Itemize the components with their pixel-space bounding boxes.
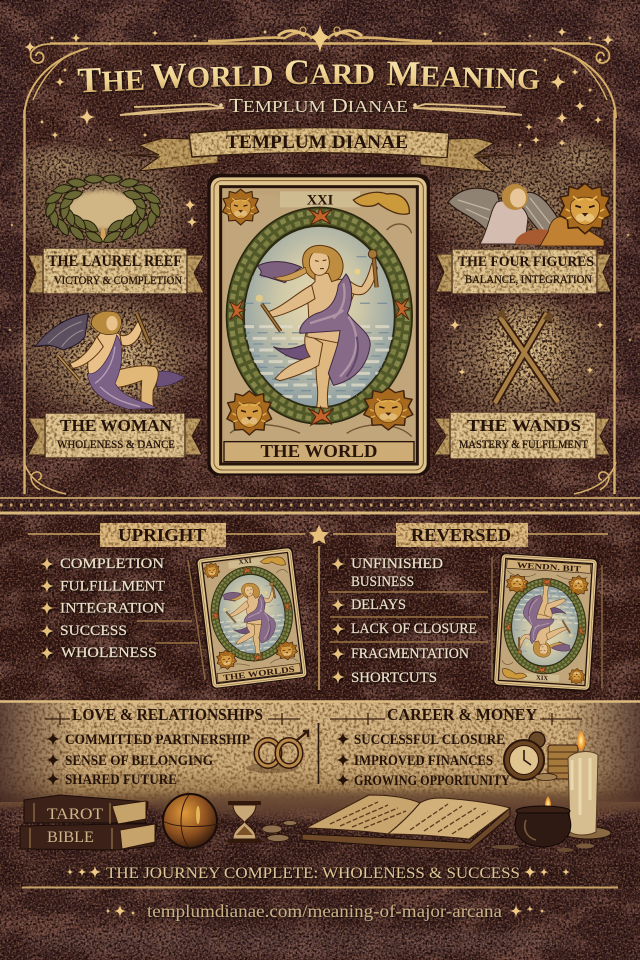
icon: pocket watch and coins <box>504 732 578 780</box>
reversed heading <box>333 523 608 547</box>
banner: The Woman: THE WOMAN <box>60 416 173 435</box>
career list <box>336 732 510 789</box>
title: THE <box>77 58 146 100</box>
reversed list: DELAYS <box>351 597 406 613</box>
title: CARD <box>284 52 375 92</box>
picture: laurel wreath <box>43 175 163 246</box>
career heading: CAREER & MONEY <box>387 705 537 724</box>
title: WORLD <box>150 53 274 96</box>
decorative star field <box>8 27 632 376</box>
love list <box>46 732 250 788</box>
frame: ornamental gold border with corner flourishes <box>24 44 616 494</box>
upright heading: UPRIGHT <box>118 525 206 545</box>
reversed card: XIX <box>536 675 549 682</box>
love list: SENSE OF BELONGING <box>65 753 213 769</box>
reversed list <box>331 556 477 686</box>
banner: The Four Figures <box>436 249 611 294</box>
love list: SHARED FUTURE <box>65 772 177 788</box>
icon: stacked books <box>20 795 157 850</box>
panel: career and money <box>330 705 582 789</box>
upright list: INTEGRATION <box>60 600 165 616</box>
banner: The Four Figures: BALANCE, INTEGRATION <box>465 272 592 286</box>
reversed list: FRAGMENTATION <box>351 646 469 662</box>
upright list <box>40 556 165 661</box>
reversed card: WENDN. BIT <box>517 561 582 574</box>
banner: The Wands: MASTERY & FULFILMENT <box>459 437 589 451</box>
picture: winged woman <box>35 311 185 409</box>
Tarot book: TAROT <box>47 806 103 823</box>
ornament: top centre star and scrollwork <box>208 24 432 53</box>
icon: two rings <box>246 731 308 773</box>
banner: The Four Figures: THE FOUR FIGURES <box>458 254 594 270</box>
icon: globe <box>163 794 222 848</box>
panel: reversed <box>328 523 608 692</box>
banner: The Woman: WHOLENESS & DANCE <box>57 437 175 451</box>
subtitle with flourish lines <box>120 95 522 117</box>
banner: The Laurel Reef <box>28 248 204 294</box>
reversed list: BUSINESS <box>351 574 414 590</box>
panel: love and relationships <box>45 705 308 788</box>
icon: hourglass <box>228 801 261 843</box>
icon: cauldron with flame <box>491 796 594 852</box>
reversed card <box>492 553 599 692</box>
card title: THE WORLD <box>260 441 378 461</box>
reversed heading: REVERSED <box>411 525 511 545</box>
career list: GROWING OPPORTUNITY <box>354 773 510 789</box>
love list: COMMITTED PARTNERSHIP <box>65 732 250 748</box>
upright card <box>196 546 308 689</box>
icon: stones <box>262 820 297 842</box>
upright list: WHOLENESS <box>61 645 157 661</box>
section rule <box>0 700 640 703</box>
Bible book: BIBLE <box>47 829 94 846</box>
divider band <box>0 498 640 513</box>
website address: templumdianae.com/meaning-of-major-arcana <box>147 901 502 921</box>
column divider <box>318 723 320 784</box>
career heading <box>330 705 582 725</box>
top ribbon banner <box>122 128 512 172</box>
reversed list: SHORTCUTS <box>351 670 437 686</box>
tagline: THE JOURNEY COMPLETE: WHOLENESS & SUCCESS <box>106 865 520 882</box>
card number: XXI <box>307 192 334 208</box>
upright list: FULFILLMENT <box>60 578 165 594</box>
banner: The Wands: THE WANDS <box>467 416 581 435</box>
icon: tall candle <box>565 730 611 839</box>
banner: The Laurel Reef: THE LAUREL REEF <box>48 253 182 270</box>
reversed list: LACK OF CLOSURE <box>351 621 477 637</box>
upright card: THE WORLDS <box>222 664 295 682</box>
career list: SUCCESSFUL CLOSURE <box>354 732 505 748</box>
title: MEANING <box>386 53 541 97</box>
love heading: LOVE & RELATIONSHIPS <box>72 705 263 724</box>
top ribbon banner: TEMPLUM DIANAE <box>226 132 408 153</box>
picture: crossed wands <box>495 308 558 403</box>
banner: The Laurel Reef: VICTORY & COMPLETION <box>54 273 182 287</box>
upright list: SUCCESS <box>60 623 127 639</box>
parchment strip <box>0 702 640 820</box>
banner: The Woman <box>28 413 202 458</box>
glow behind wreath <box>67 190 139 230</box>
banner: The Wands <box>434 412 610 459</box>
upright heading <box>28 523 305 547</box>
panel: upright <box>28 523 308 689</box>
subtitle with flourish lines: TEMPLUM DIANAE <box>229 95 408 117</box>
title <box>77 52 541 100</box>
upright card: XXI <box>238 557 252 566</box>
centre star divider <box>309 525 329 690</box>
central card: The World <box>207 174 430 476</box>
upright list: COMPLETION <box>60 556 164 572</box>
reversed list: UNFINISHED <box>351 556 443 572</box>
picture: angel and lion <box>448 183 611 246</box>
career list: IMPROVED FINANCES <box>354 753 493 769</box>
icon: open book <box>302 795 510 850</box>
